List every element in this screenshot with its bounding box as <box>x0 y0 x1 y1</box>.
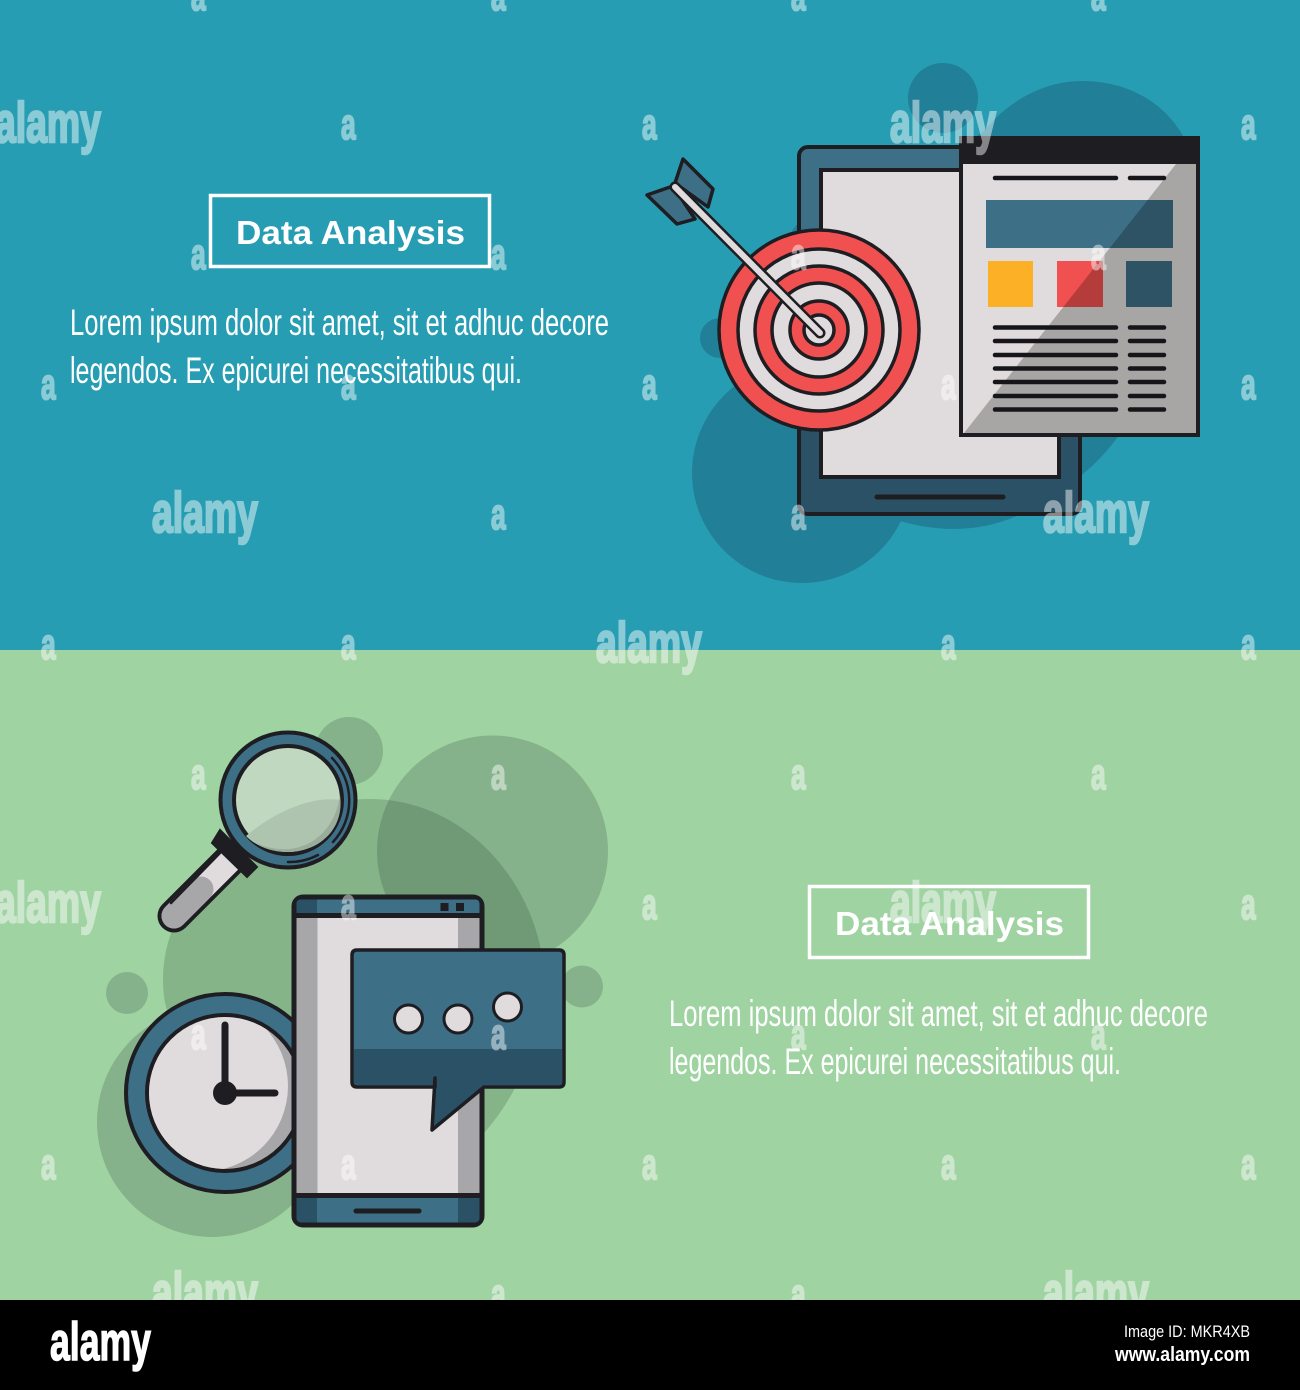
watermark overlay: a <box>491 1269 506 1319</box>
watermark overlay: a <box>791 749 806 799</box>
watermark overlay: alamy <box>890 871 996 935</box>
top background circles <box>692 63 1197 583</box>
watermark overlay: a <box>491 749 506 799</box>
watermark overlay: a <box>1091 1009 1106 1059</box>
icon: arrow <box>647 159 820 333</box>
heading box: Data Analysis (bottom) <box>810 886 1088 958</box>
body text (top): Lorem ipsum dolor sit amet, sit et adhuc decore <box>70 302 609 343</box>
watermark overlay: a <box>1241 359 1256 409</box>
watermark overlay: a <box>491 1009 506 1059</box>
watermark overlay: a <box>341 359 356 409</box>
icon: clock <box>124 992 292 1194</box>
watermark overlay: a <box>41 1139 56 1189</box>
watermark overlay: alamy <box>1043 481 1149 545</box>
body text (top): legendos. Ex epicurei necessitatibus qui. <box>70 350 522 391</box>
watermark overlay: a <box>191 1009 206 1059</box>
watermark overlay: a <box>791 489 806 539</box>
watermark overlay: a <box>491 229 506 279</box>
watermark overlay: a <box>941 619 956 669</box>
watermark overlay: a <box>1091 749 1106 799</box>
footer bar <box>0 1300 1300 1390</box>
watermark overlay: a <box>791 1269 806 1319</box>
heading box: Data Analysis (top): Data Analysis <box>236 214 465 251</box>
watermark overlay: a <box>341 879 356 929</box>
icon: target <box>719 230 919 430</box>
heading box: Data Analysis (top) <box>210 196 490 266</box>
watermark overlay: a <box>642 1139 657 1189</box>
watermark overlay: alamy <box>1043 1261 1149 1325</box>
heading box: Data Analysis (bottom): Data Analysis <box>835 905 1064 942</box>
watermark overlay: alamy <box>596 611 702 675</box>
bottom background circles <box>97 717 608 1237</box>
watermark overlay: a <box>642 99 657 149</box>
watermark overlay: a <box>642 359 657 409</box>
watermark overlay: a <box>1241 1139 1256 1189</box>
icon: web page window <box>959 136 1200 435</box>
body text (bottom) <box>669 993 1208 1082</box>
watermark overlay: a <box>41 619 56 669</box>
panel: top teal banner <box>0 0 1300 650</box>
website url: www.alamy.com <box>1114 1344 1250 1366</box>
watermark overlay: a <box>1091 229 1106 279</box>
watermark overlay: a <box>191 749 206 799</box>
watermark overlay: alamy <box>890 91 996 155</box>
watermark overlay: a <box>642 879 657 929</box>
watermark overlay: a <box>1241 879 1256 929</box>
watermark overlay: a <box>791 229 806 279</box>
watermark overlay: a <box>791 1009 806 1059</box>
body text (top) <box>70 302 609 391</box>
icon: magnifying glass <box>171 732 356 916</box>
watermark overlay: a <box>941 359 956 409</box>
watermark overlay: alamy <box>152 481 258 545</box>
watermark overlay: a <box>41 359 56 409</box>
icon: tablet <box>799 147 1080 514</box>
watermark overlay: alamy <box>152 1261 258 1325</box>
watermark overlay: a <box>341 619 356 669</box>
icon: smartphone <box>294 897 482 1225</box>
watermark overlay: a <box>1241 619 1256 669</box>
icon: speech bubble <box>352 950 564 1130</box>
watermark overlay: a <box>491 489 506 539</box>
watermark overlay: a <box>341 99 356 149</box>
image id: Image ID: MKR4XB <box>1124 1322 1250 1341</box>
panel: bottom green banner <box>0 650 1300 1300</box>
watermark overlay: a <box>1241 99 1256 149</box>
watermark overlay: a <box>941 1139 956 1189</box>
watermark overlay: a <box>341 1139 356 1189</box>
footer logo: alamy <box>50 1312 151 1372</box>
watermark overlay: a <box>191 229 206 279</box>
